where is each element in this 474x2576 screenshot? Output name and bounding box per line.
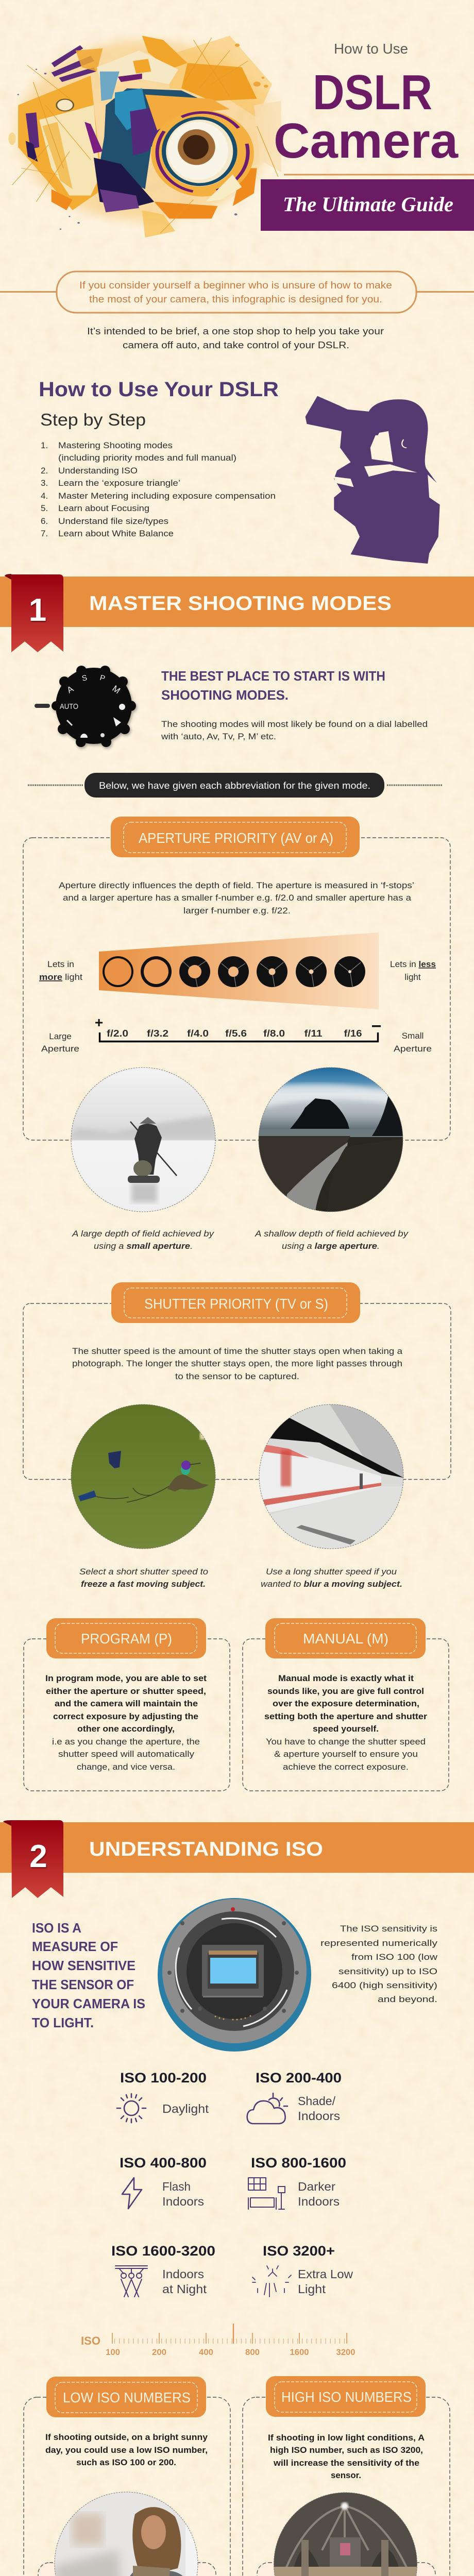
caption: short shutter speed: freeze a fast moving subject. (81, 1579, 206, 1589)
section band 2: understanding ISO: UNDERSTANDING ISO (89, 1838, 323, 1860)
text: manual mode: sounds like, you are give full control (267, 1686, 424, 1696)
heading: aperture priority (111, 817, 360, 857)
text: manual mode: over the exposure determination, (273, 1699, 419, 1708)
text: program mode: either the aperture or shutter speed, (46, 1686, 206, 1696)
panel: low ISO numbers (24, 2377, 230, 2576)
chart: aperture scale wedge (99, 933, 379, 1009)
step list: Learn the ‘exposure triangle’ (58, 478, 180, 488)
ISO 3200+ extra low light (252, 2243, 353, 2297)
text: shooting modes dial (161, 719, 428, 741)
heading: program (46, 1618, 206, 1658)
ISO 100-200 daylight: ISO 100-200 (120, 2070, 207, 2086)
text: ISO sensitivity: and beyond. (378, 1994, 437, 2004)
title: Camera: Camera (274, 113, 459, 168)
step list: 7. (41, 529, 48, 538)
step list: Learn about White Balance (58, 529, 174, 538)
text: low ISO: day, you could use a low ISO number, (45, 2445, 208, 2455)
heading: what ISO is: MEASURE OF (32, 1939, 118, 1954)
ISO 400-800 flash: ISO 400-800 (120, 2155, 207, 2171)
text: high ISO (268, 2433, 425, 2480)
label: small aperture: Small (402, 1031, 424, 1041)
text: manual mode: & aperture yourself to ensure you (274, 1749, 418, 1759)
step list: Learn about Focusing (58, 503, 149, 513)
chart: ISO scale ruler: 3200 (336, 2347, 356, 2357)
text: program mode: shutter speed will automatically (58, 1749, 195, 1759)
caption: large depth of field: using a small aperture . (94, 1241, 193, 1251)
heading: what ISO is (32, 1920, 145, 2030)
text: program mode: and the camera will maintain the (55, 1699, 198, 1708)
intro text (87, 326, 384, 350)
icon: shooting mode dial: AUTO (60, 702, 78, 711)
callout pill: abbreviations (28, 773, 442, 798)
step list: Understand file size/types (58, 516, 168, 526)
ISO 400-800 flash: Indoors (162, 2195, 204, 2208)
text: shooting modes dial: with ‘auto, Av, Tv, P, M’ etc. (161, 732, 276, 741)
chart: ISO scale ruler: 400 (199, 2347, 213, 2357)
caption: shallow depth of field: A shallow depth of field achieved by (255, 1229, 409, 1239)
heading: what ISO is: HOW SENSITIVE (32, 1958, 136, 1973)
step list: 6. (41, 516, 48, 526)
step list: (including priority modes and full manual) (58, 453, 236, 463)
text: manual mode: Manual mode is exactly what it (278, 1673, 414, 1683)
text: ISO sensitivity: 6400 (high sensitivity) (332, 1980, 437, 1990)
icon: photographer silhouette (306, 396, 440, 564)
heading: manual (265, 1618, 426, 1658)
callout: who this is for: the most of your camera, this infographic is designed for you. (89, 294, 382, 305)
photo: hummingbird, fast shutter (71, 1404, 215, 1549)
text: high ISO: If shooting in low light conditions, A (268, 2433, 425, 2443)
scale: f-stop bracket: f/16 (344, 1028, 362, 1039)
icon: fireworks (252, 2266, 291, 2297)
ISO 3200+ extra low light: ISO 3200+ (263, 2243, 335, 2259)
text: manual mode: achieve the correct exposure. (283, 1762, 409, 1772)
text: manual mode: You have to change the shutter speed (266, 1737, 426, 1747)
text: aperture explanation: larger f-number e.g. f/22. (183, 906, 291, 916)
ISO 200-400 shade: Shade/ (298, 2094, 336, 2108)
label: large aperture (41, 1031, 79, 1054)
heading: what ISO is: ISO IS A (32, 1920, 81, 1936)
ISO 800-1600 darker indoors: Darker (298, 2180, 335, 2193)
label: lets in less light: Lets in less (390, 959, 436, 969)
heading: low ISO: LOW ISO NUMBERS (63, 2389, 191, 2405)
heading: shutter priority (111, 1282, 360, 1323)
section band 1: master shooting modes (0, 574, 474, 652)
caption: long shutter speed: wanted to blur a moving subject. (261, 1579, 402, 1589)
section band 1: master shooting modes: 1 (29, 592, 46, 628)
icon: cloud and sun (247, 2093, 287, 2124)
heading: low ISO (46, 2377, 206, 2417)
chart: ISO scale ruler: 100 (106, 2347, 120, 2357)
text: ISO sensitivity: from ISO 100 (low (351, 1952, 438, 1962)
label: small aperture: Aperture (394, 1044, 432, 1054)
panel: aperture priority (23, 817, 450, 1140)
text: ISO sensitivity: sensitivity) up to ISO (338, 1967, 437, 1976)
step list: Master Metering including exposure compensation (58, 491, 276, 501)
section band 2: understanding ISO (0, 1820, 474, 1898)
icon: camera sensor mount (158, 1898, 311, 2052)
text: manual mode: setting both the aperture and shutter (264, 1711, 427, 1721)
ISO 1600-3200 night (111, 2243, 215, 2297)
ISO 400-800 flash: Flash (162, 2180, 191, 2193)
ISO 100-200 daylight: Daylight (162, 2102, 209, 2115)
text: shutter explanation: photograph. The longer the shutter stays open, the more light passes through (72, 1359, 402, 1368)
caption: long shutter speed (261, 1567, 402, 1589)
step list: 1. (41, 440, 48, 450)
text: program mode: change, and vice versa. (77, 1762, 175, 1772)
text: shutter explanation: The shutter speed is the amount of time the shutter stays open when taking a (72, 1346, 403, 1356)
subtitle banner: The Ultimate Guide (261, 174, 474, 231)
text: ISO sensitivity: The ISO sensitivity is (340, 1924, 437, 1934)
text: shutter explanation (72, 1346, 403, 1381)
scale: f-stop bracket: f/11 (304, 1028, 323, 1039)
ISO 1600-3200 night: Indoors (162, 2267, 204, 2281)
ISO 800-1600 darker indoors (248, 2155, 346, 2209)
heading: what ISO is: TO LIGHT. (32, 2015, 94, 2030)
caption: shallow depth of field: using a large aperture . (282, 1241, 380, 1251)
caption: short shutter speed (79, 1567, 208, 1589)
heading: How to Use Your DSLR: How to Use Your DSLR (39, 378, 279, 401)
photo: woman, ISO 100 (55, 2492, 201, 2576)
callout: who this is for: If you consider yourself a beginner who is unsure of how to make (79, 280, 392, 291)
panel: high ISO numbers (243, 2376, 450, 2576)
step list: Mastering Shooting modes (58, 440, 173, 450)
icon: shooting mode dial: S (81, 673, 88, 683)
ISO 800-1600 darker indoors: ISO 800-1600 (251, 2155, 346, 2171)
label: large aperture: Aperture (41, 1044, 79, 1054)
heading: high ISO (266, 2376, 426, 2417)
ISO 3200+ extra low light: Extra Low (298, 2267, 353, 2281)
photo: cathedral, ISO 1600 (274, 2493, 417, 2576)
step list: 3. (41, 478, 48, 488)
icon: stage lights (115, 2266, 147, 2297)
text: low ISO: If shooting outside, on a bright sunny (45, 2432, 208, 2442)
icon: painted camera illustration (8, 36, 281, 238)
title: How to Use: How to Use (334, 41, 408, 57)
label: lets in less light (390, 959, 436, 982)
panel: shutter priority (23, 1282, 451, 1480)
heading: manual: MANUAL (M) (303, 1631, 388, 1647)
scale: f-stop bracket: + (95, 1014, 103, 1030)
text: shutter explanation: to the sensor to be captured. (175, 1371, 299, 1381)
heading: what ISO is: YOUR CAMERA IS (32, 1996, 145, 2011)
ISO 200-400 shade: ISO 200-400 (256, 2070, 342, 2086)
icon: sun (117, 2094, 146, 2123)
scale: f-stop bracket: f/8.0 (263, 1028, 285, 1039)
icon: shooting mode dial (35, 666, 136, 747)
text: low ISO (45, 2432, 208, 2467)
photo: subway train, slow shutter (258, 1404, 403, 1549)
caption: short shutter speed: Select a short shutter speed to (79, 1567, 208, 1577)
text: program mode: other one accordingly, (77, 1724, 175, 1734)
step list: 4. (41, 491, 48, 501)
chart: ISO scale ruler (81, 2324, 356, 2357)
ISO 200-400 shade (247, 2070, 342, 2124)
scale: f-stop bracket: f/4.0 (187, 1028, 209, 1039)
text: aperture explanation: Aperture directly influences the depth of field. The aperture is measured in ‘f-stops’ (59, 880, 414, 890)
heading: best place to start (161, 668, 385, 703)
heading: best place to start: THE BEST PLACE TO START IS WITH (161, 668, 385, 684)
icon: sofa and window (248, 2178, 285, 2209)
panel: high ISO samples backing (257, 2563, 435, 2576)
scale: f-stop bracket: f/5.6 (225, 1028, 247, 1039)
caption: shallow depth of field (255, 1229, 409, 1251)
caption: large depth of field: A large depth of field achieved by (72, 1229, 215, 1239)
label: lets in more light: more light (39, 972, 82, 982)
label: lets in less light: light (404, 972, 421, 982)
icon: shooting mode dial: M (110, 684, 122, 696)
text: program mode: i.e as you change the aperture, the (52, 1737, 200, 1747)
text: high ISO: will increase the sensitivity of the (273, 2458, 419, 2468)
step list: 5. (41, 503, 48, 513)
ISO 400-800 flash (120, 2155, 207, 2209)
text: manual mode: speed yourself. (313, 1724, 379, 1734)
label: small aperture (394, 1031, 432, 1054)
chart: ISO scale ruler: 1600 (290, 2347, 309, 2357)
step list (41, 440, 276, 538)
ISO 3200+ extra low light: Light (298, 2282, 326, 2296)
photo: sea stack, shallow depth of field (259, 1067, 403, 1212)
scale: f-stop bracket (95, 1014, 381, 1042)
ISO 800-1600 darker indoors: Indoors (298, 2195, 340, 2208)
text: aperture explanation (59, 880, 414, 916)
ISO 1600-3200 night: ISO 1600-3200 (111, 2243, 215, 2259)
caption: long shutter speed: Use a long shutter speed if you (266, 1567, 397, 1577)
photo: boatman, large depth of field (71, 1067, 215, 1212)
text: program mode (45, 1673, 207, 1772)
icon: shooting mode dial: P (99, 673, 106, 683)
panel: low ISO samples backing (38, 2563, 216, 2576)
section band 2: understanding ISO: 2 (29, 1839, 47, 1874)
heading: shutter priority: SHUTTER PRIORITY (TV or S) (144, 1296, 328, 1312)
callout pill: abbreviations: Below, we have given each abbreviation for the given mode. (99, 781, 370, 791)
heading: high ISO: HIGH ISO NUMBERS (281, 2389, 412, 2405)
chart: ISO scale ruler: ISO (81, 2334, 100, 2347)
panel: program mode (24, 1618, 230, 1791)
text: manual mode (264, 1673, 427, 1772)
text: ISO sensitivity (320, 1924, 438, 2004)
heading: program: PROGRAM (P) (81, 1631, 172, 1647)
ISO 100-200 daylight (117, 2070, 209, 2123)
icon: lightning bolt (122, 2178, 142, 2209)
scale: f-stop bracket: f/2.0 (107, 1028, 128, 1039)
panel: manual mode (243, 1618, 449, 1791)
text: program mode: In program mode, you are able to set (45, 1673, 207, 1683)
intro text: camera off auto, and take control of your DSLR. (123, 340, 349, 350)
heading: aperture priority: APERTURE PRIORITY (AV or A) (139, 830, 333, 846)
chart: ISO scale ruler: 800 (245, 2347, 260, 2357)
text: ISO sensitivity: represented numerically (320, 1938, 438, 1948)
heading: Step by Step: Step by Step (40, 410, 146, 429)
text: high ISO: high ISO number, such as ISO 3200, (270, 2445, 423, 2455)
label: lets in more light (39, 959, 82, 982)
text: shooting modes dial: The shooting modes will most likely be found on a dial labelled (161, 719, 428, 729)
subtitle banner: The Ultimate Guide: The Ultimate Guide (283, 193, 453, 216)
callout: who this is for (0, 272, 474, 313)
label: large aperture: Large (49, 1031, 72, 1041)
text: high ISO: sensor. (331, 2470, 361, 2480)
label: lets in more light: Lets in (47, 959, 74, 969)
section band 1: master shooting modes: MASTER SHOOTING MODES (89, 592, 392, 615)
caption: large depth of field (72, 1229, 215, 1251)
text: aperture explanation: and a larger aperture has a smaller f-number e.g. f/2.0 and smaller aperture has a (63, 893, 412, 903)
ISO 200-400 shade: Indoors (298, 2109, 340, 2123)
step list: 2. (41, 466, 48, 476)
title: DSLR: DSLR (313, 65, 432, 120)
step list: Understanding ISO (58, 466, 138, 476)
heading: what ISO is: THE SENSOR OF (32, 1977, 134, 1992)
intro text: It’s intended to be brief, a one stop shop to help you take your (87, 326, 384, 336)
ISO 1600-3200 night: at Night (162, 2282, 207, 2296)
text: low ISO: such as ISO 100 or 200. (76, 2458, 176, 2467)
icon: shooting mode dial: A (65, 684, 75, 695)
text: program mode: correct exposure by adjusting the (53, 1711, 198, 1721)
heading: best place to start: SHOOTING MODES. (161, 687, 289, 703)
chart: ISO scale ruler: 200 (152, 2347, 166, 2357)
scale: f-stop bracket: f/3.2 (147, 1028, 168, 1039)
